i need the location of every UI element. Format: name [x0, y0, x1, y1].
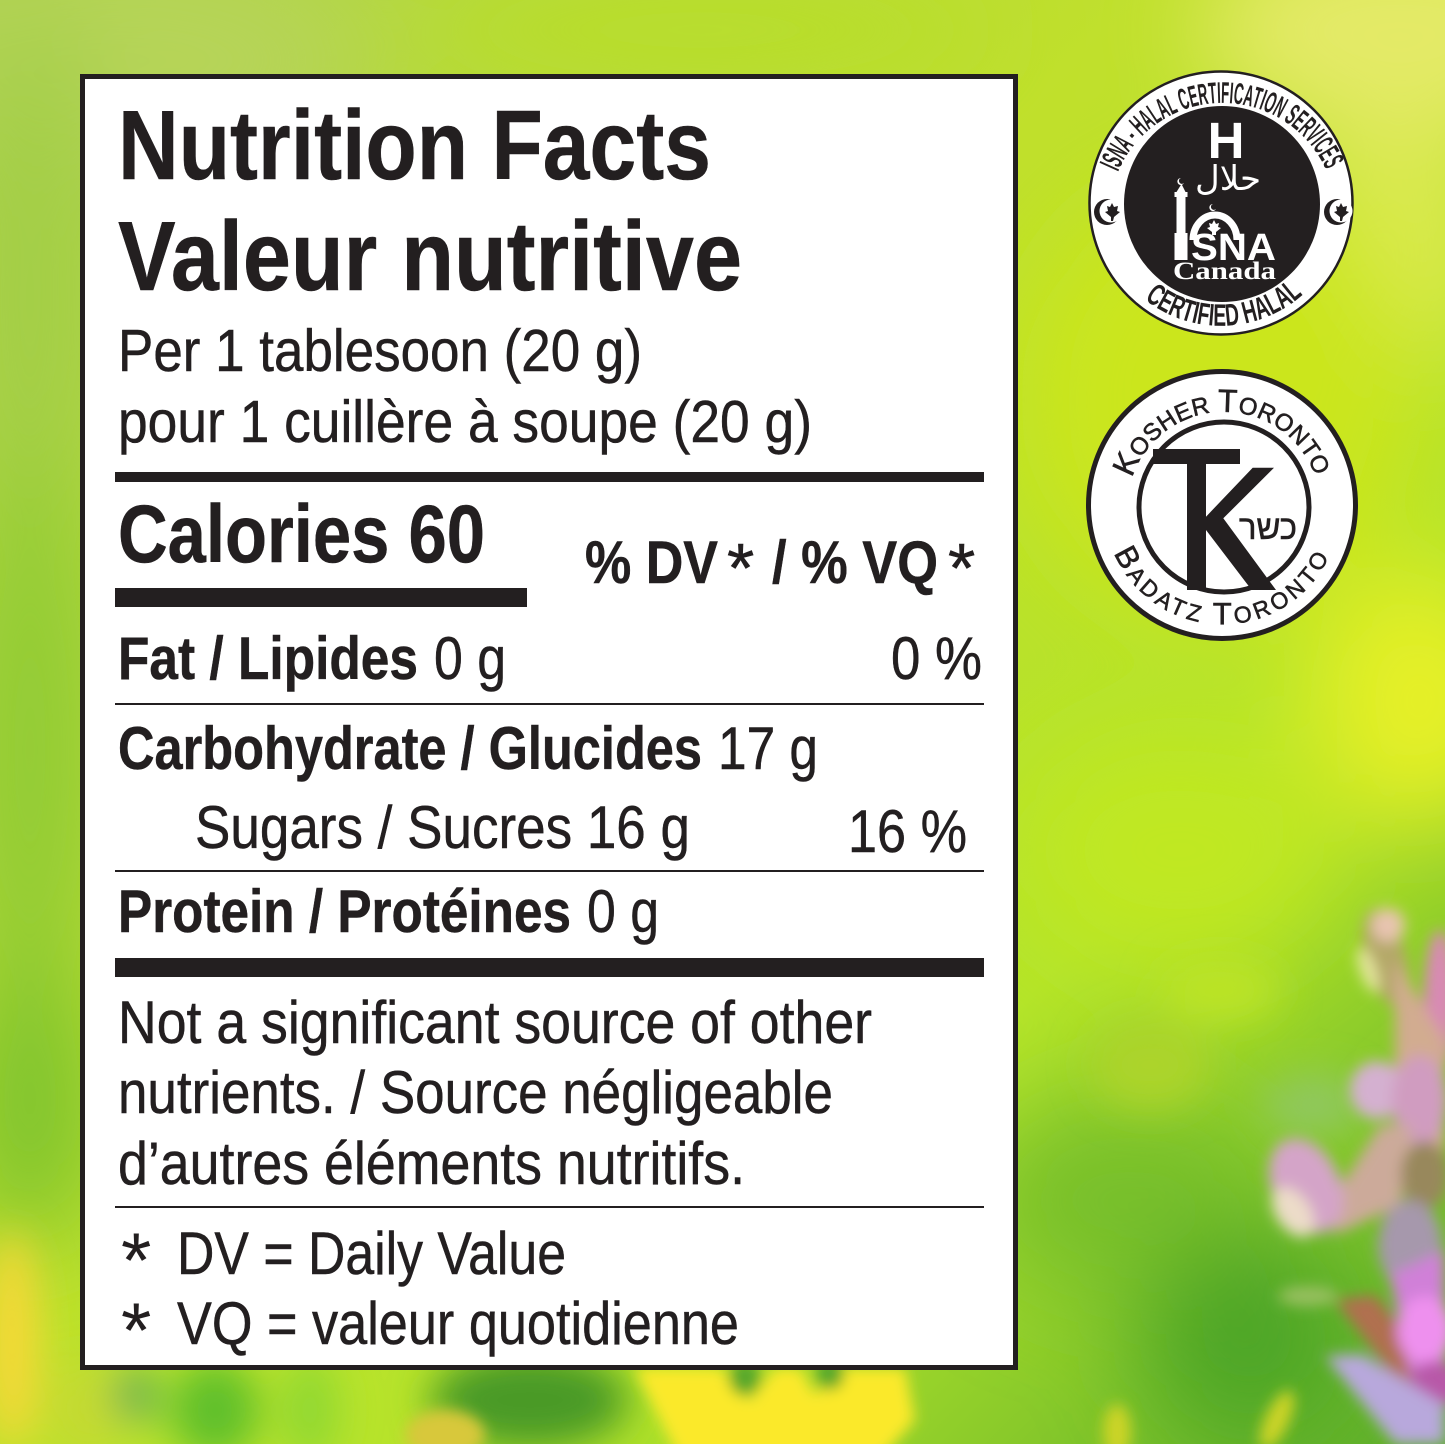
footnote: valeur quotidienne [121, 1286, 739, 1374]
hebrew word kosher: כשר [1239, 509, 1297, 547]
row: carbohydrate: 17 g [718, 715, 818, 782]
serving size: French: pour 1 cuillère à soupe (20 g) [118, 389, 812, 455]
flower: blurred pink buds [1254, 905, 1445, 1444]
daily value heading: / % VQ [772, 529, 938, 596]
row: carbohydrate: Carbohydrate / Glucides [118, 715, 702, 782]
heading: Valeur nutritive: Valeur nutritive [118, 201, 742, 311]
badge text: ISNA - Halal Certification Services: ISNA - HALAL CERTIFICATION SERVICES [1100, 82, 1344, 172]
logo letter K [1206, 468, 1276, 590]
icon: right crescent and maple leaf [1324, 199, 1352, 225]
row: fat: Fat / Lipides [118, 625, 418, 692]
heading: Nutrition Facts: Nutrition Facts [118, 90, 711, 200]
footnote: daily value [121, 1216, 566, 1304]
row: protein: Protein / Protéines [118, 878, 571, 945]
row: sugars [195, 794, 967, 865]
badge text: Badatz Toronto: BADATZ TORONTO [1114, 544, 1326, 625]
arabic word halal: حلال [1195, 159, 1261, 199]
icon: dome with maple leaf [1193, 204, 1237, 240]
badge text: Certified Halal: CERTIFIED HALAL [1148, 282, 1302, 326]
serving size: English: Per 1 tablesoon (20 g) [118, 318, 642, 384]
footnote: valeur quotidienne: VQ = valeur quotidienne [177, 1290, 739, 1357]
daily value heading: % DV [585, 529, 718, 596]
thick rule below serving size [115, 472, 984, 482]
footnote: valeur quotidienne: * [121, 1286, 151, 1374]
badge: Kosher Toronto [1086, 369, 1358, 641]
daily value heading: * [948, 529, 975, 607]
note: other nutrients: nutrients. / Source négligeable [118, 1059, 833, 1126]
row: sugars: 16 % [848, 798, 967, 865]
badge text: Kosher Toronto: KOSHER TORONTO [1112, 389, 1328, 476]
daily value heading: * [727, 529, 754, 607]
letter H: H [1208, 112, 1244, 169]
footnote: daily value: DV = Daily Value [177, 1220, 566, 1287]
icon: left crescent and maple leaf [1094, 199, 1122, 225]
daily value heading [585, 529, 975, 607]
footnote: daily value: * [121, 1216, 151, 1304]
badge: ISNA Canada certified halal [1088, 70, 1354, 336]
calories: Calories 60 [118, 489, 485, 580]
row: protein: 0 g [587, 878, 659, 945]
row: fat [118, 625, 982, 692]
row: fat: 0 g [434, 625, 506, 692]
logo letter T [1153, 449, 1240, 590]
Canada wordmark: Canada [1173, 258, 1277, 285]
thick rule below protein [115, 958, 984, 977]
note: other nutrients: d’autres éléments nutritifs. [118, 1130, 745, 1197]
note: other nutrients: Not a significant source of other [118, 989, 872, 1056]
ISNA wordmark: SNA [1191, 227, 1276, 269]
panel: nutrition facts table [82, 76, 1016, 1374]
icon: minaret [1174, 178, 1188, 260]
calories thick rule [115, 588, 527, 607]
row: sugars: Sugars / Sucres 16 g [195, 794, 690, 861]
row: fat: 0 % [891, 625, 982, 692]
note: other nutrients [118, 989, 872, 1197]
